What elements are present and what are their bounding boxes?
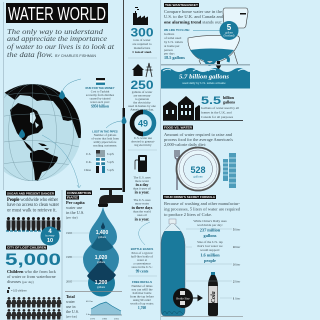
text: per capita: in the U.S. [66, 210, 84, 215]
text: oil comparison: in a year. [135, 190, 149, 194]
stat: 5.5 billion gallons: gallons [223, 100, 235, 104]
panel: free refills: 1,760 [138, 306, 146, 310]
stat: 250: American per day. [130, 108, 154, 112]
text: oil comparison: The U.S. uses [133, 176, 151, 180]
drops chart: 1,020 [95, 255, 107, 261]
text: people walking for water: or must walk to retrieve it. [7, 208, 57, 214]
text: oil comparison: The U.S. uses [133, 198, 151, 202]
bottle scale labels: 5 liter [233, 228, 240, 232]
callout: 4 in every 10: 10 [47, 238, 53, 244]
heading: sugar and present danger: SUGAR AND PRESENT DANGER [7, 192, 55, 196]
panel: bottle basics: 99 cents [136, 270, 149, 274]
panel: lost in the pipes: 6 qt/$ [107, 152, 114, 156]
panel: bottle basics: a convenience [133, 262, 151, 266]
water wave band [161, 64, 250, 88]
stat: 300: are required to [132, 42, 152, 46]
callout: 5 gallons: gallons [225, 32, 233, 34]
drops chart: gallons [97, 286, 105, 289]
intro text: the data flow. [7, 51, 53, 59]
text: oil comparison: in a day [136, 183, 149, 187]
heading: home water: THE WASTEBASKET [165, 3, 198, 7]
stat: 250: gallons of water [132, 90, 153, 94]
stat: 5.5 billion gallons: 5.5 [201, 95, 221, 107]
text: per capita: Per capita [66, 200, 86, 205]
icon: honduras flag [96, 78, 105, 85]
panel: bottle basics: Price of a typical [131, 251, 153, 255]
text: food [164, 132, 233, 148]
stat: 300: 300 [130, 26, 154, 40]
text: food: Amount of water required to raise and [164, 132, 233, 137]
bottle scale labels: 1 liter [233, 296, 240, 300]
panel: lost in the pipes: of water that leak from [91, 136, 119, 140]
bottle scale labels: 4 liter [233, 245, 240, 249]
text: china: While China's Daily uses [193, 219, 227, 223]
text: drink [164, 201, 241, 217]
icon: gas pump [135, 155, 147, 172]
panel: free refills: from the tap before [130, 294, 155, 298]
intro text: of water to our lives is to look at [7, 43, 115, 51]
panel: free refills: worth of tap water: [130, 302, 154, 306]
text: oil comparison [132, 176, 153, 222]
text: china: 237 million [200, 228, 221, 232]
callout: 5 gallons [193, 21, 238, 40]
legend: = 100 children [11, 290, 27, 292]
drops chart: 1,400 [96, 230, 108, 236]
bottle scale [186, 229, 232, 298]
globe map [0, 79, 85, 188]
panel: lost in the pipes: 5 qt/$ [107, 160, 114, 164]
panel: bottle basics [131, 222, 154, 274]
text: china: would support: [200, 248, 220, 252]
panel: lost in the pipes [84, 121, 121, 173]
icon: faucet [98, 188, 123, 207]
text: oil comparison: in three days [132, 206, 153, 210]
area chart: total water use: water [66, 299, 76, 304]
panel: bottle basics: BOTTLE BASICS [131, 247, 153, 251]
water wave band: 5.7 billion gallons [179, 74, 230, 80]
stat: 300: manufacture [134, 46, 151, 50]
intro text: BY CHARLES FISHMAN [55, 54, 97, 58]
donut: 49 percent [131, 112, 155, 147]
callout: circle arrow [173, 288, 202, 308]
panel: free refills: half-liter bottle [133, 291, 152, 295]
text: we like to flush: Gallons [164, 32, 175, 36]
stat: 300 [130, 26, 154, 54]
text: china: 1.6 million [200, 252, 220, 258]
stat: 250: used in homes by one [128, 104, 156, 108]
panel: free refills: using 99 cents' [133, 298, 152, 302]
text: food: process food for the average American's [164, 137, 233, 142]
text: china [193, 219, 227, 263]
donut: 49 percent: 49 [138, 118, 148, 128]
text: we like to flush: WE LIKE TO FLUSH [164, 28, 189, 32]
stat: 250 [128, 78, 156, 112]
text: per capita [66, 200, 86, 220]
text: we like to flush: of toilet used [164, 36, 182, 40]
donut: 49 percent: devoted to generat- [131, 140, 155, 144]
drops chart: gallons [98, 236, 106, 239]
area chart: total water use: use in [66, 304, 75, 309]
panel: lost in the pipes: 5 qt/$ [107, 168, 114, 172]
drops chart: 1965 [66, 231, 73, 235]
stat: 250: 250 [130, 78, 154, 92]
text: china: people [204, 258, 216, 263]
text: compare: one alarming trend stands out: [164, 20, 222, 24]
stat: 5.5 billion gallons: Canada for all purposes [201, 115, 234, 119]
stat: 250: to generate [135, 97, 150, 101]
panel: bottle basics: half-liter bottle of [131, 254, 154, 258]
area chart: total water use: 410 bn [86, 300, 94, 303]
panel: run for the money: water each year: [90, 100, 110, 104]
text: people walking for water: People worldwide who either [7, 198, 58, 203]
callout: 4 in every 10: in every [45, 234, 55, 238]
stat: 250: the electricity [133, 100, 151, 104]
icon: plate with fork and knife [175, 148, 236, 190]
callout: circle arrow: Bottle Size [176, 296, 190, 300]
icon: factory [133, 7, 148, 25]
text: oil comparison: in a year. [135, 218, 149, 222]
text: people walking for water [7, 198, 59, 214]
panel: lost in the pipes: LOST IN THE PIPES [92, 130, 118, 134]
area chart: total water use: 0 bn [86, 313, 91, 316]
text: compare: U.S. to the U.K. and Canada and [164, 14, 224, 19]
stat: 5.5 billion gallons: billion [223, 95, 235, 100]
text: drink: Because of washing and other manufactur- [164, 201, 241, 206]
panel: lost in the pipes: utility pipes before [94, 140, 117, 144]
heading: consumption [66, 190, 92, 200]
donut: 49 percent: ing electricity [134, 143, 152, 147]
panel: run for the money: economy from diarrhea [86, 93, 115, 97]
stat: 5,000: 5,000 [5, 250, 61, 269]
stat: 300: tons of water [133, 38, 152, 42]
panel: run for the money [86, 78, 115, 108]
panel: run for the money: Cost to Turkish [91, 90, 110, 94]
callout: 5 gallons: (Scotland) [224, 34, 235, 38]
drops chart: 1985 [66, 255, 73, 259]
text: oil comparison: more water [135, 179, 149, 183]
panel: lost in the pipes: reaching customers: [93, 144, 117, 148]
text: china: that's lost water we [197, 244, 223, 248]
text: china: gallons [204, 233, 217, 238]
panel: free refills: you can refill the [131, 288, 153, 292]
panel: lost in the pipes: U.S. [86, 152, 91, 156]
icon: toilet [188, 8, 248, 70]
donut: 49 percent: U.S. water use [134, 136, 153, 140]
area chart: total water use [66, 294, 122, 320]
callout: 4 in every 10: 4 [48, 229, 52, 235]
stat: 250: are necessary [133, 94, 151, 98]
drops chart: gallons [97, 261, 105, 264]
panel: lost in the pipes: U.K. [86, 160, 92, 164]
panel: bottle basics: store in the U.S.: [132, 265, 153, 269]
icon: small cola bottle [208, 272, 218, 316]
heading: your drink's secret formula: YOUR DRINK'S SECRET FORMULA [164, 195, 216, 199]
panel: run for the money: RUN FOR THE MONEY [86, 86, 115, 90]
heading: consumption: RATE [67, 196, 78, 200]
callout: 4 in every 10 [40, 226, 60, 246]
text: oil comparison: uses oil [137, 213, 147, 217]
panel: run for the money: $950 billion [91, 104, 109, 108]
callout: 5 gallons: 5 [227, 23, 232, 32]
text: china: worldwide per day: [197, 223, 223, 227]
text: drink: to produce 2 liters of Coke. [164, 212, 212, 217]
icon: row houses [163, 96, 200, 120]
heading: consumption: CONSUMPTION [67, 191, 91, 195]
pipe [122, 0, 126, 192]
legend [7, 287, 27, 293]
intro text: and appreciate the importance [7, 35, 108, 43]
drops chart: 1,200 [95, 280, 107, 286]
children figures [6, 297, 62, 320]
text: compare: Compare home water use in the [164, 9, 222, 14]
stat: 300: 1 ton of steel. [132, 50, 152, 54]
icon: large water bottle [161, 219, 185, 316]
text: per capita: water use [66, 205, 82, 210]
text: we like to flush: at home per [164, 44, 180, 48]
panel: free refills: FREE REFILLS [132, 280, 152, 284]
bottle scale labels: 3 liter [233, 262, 240, 266]
text: we like to flush: by U.S. toilets [164, 40, 184, 44]
icon: flags [96, 150, 105, 173]
intro text: The only way to understand [7, 28, 103, 36]
text: oil comparison: than the world [133, 210, 151, 214]
text: per capita: (per day) [66, 216, 78, 220]
drops chart: 2005 [66, 280, 73, 284]
text: compare [164, 9, 224, 24]
text: we like to flush: 18.5 gallons [164, 55, 185, 60]
icon: house and pylon [132, 63, 152, 77]
text: children: Children who die from lack [7, 269, 57, 274]
stat: 5.5 billion gallons: Gallons of water used by all [201, 106, 239, 110]
heading: city of lost children: CITY OF LOST CHILDREN [7, 246, 46, 250]
icon: small cola bottle: Cola [211, 291, 217, 303]
stat: 5.5 billion gallons [201, 95, 239, 119]
water wave band: used daily by U.S. toilets at home [182, 81, 226, 85]
area chart: total water use: (per day) [66, 314, 77, 318]
text: children [7, 269, 57, 284]
text: oil comparison: more water [135, 202, 149, 206]
text: drink: ing processes, 5 liters of water are required [164, 206, 241, 212]
panel: run for the money: caused by tainted [90, 96, 111, 100]
bottle scale labels [233, 228, 240, 300]
panel: bottle basics: water at [137, 258, 147, 262]
people figures [6, 217, 61, 231]
icon: plate with fork and knife: gallons [193, 174, 203, 178]
text: people walking for water: have no access to clean water [7, 203, 59, 208]
panel: free refills [130, 280, 155, 310]
panel: lost in the pipes: Number of gallons [94, 133, 117, 137]
stat: 5.5 billion gallons: homes in the U.K. and [201, 110, 232, 114]
text: china: Size of the U.S. tap [197, 240, 223, 244]
panel: lost in the pipes: China [84, 168, 92, 172]
title: WATER WORLD [8, 4, 106, 24]
heading: food vs water: FOOD VS. WATER [164, 126, 193, 130]
drops chart [66, 207, 119, 296]
area chart: total water use: the U.S. [66, 309, 79, 314]
icon: plate with fork and knife: 528 [190, 165, 206, 175]
text: we like to flush [164, 28, 189, 60]
text: we like to flush: person [164, 48, 173, 52]
text: we like to flush: per day: [164, 52, 175, 56]
text: children: of water or from waterborne [7, 274, 56, 279]
panel: free refills: Number of times [132, 284, 153, 288]
bottle scale labels: 2 liter [233, 280, 240, 284]
text: oil comparison: than it uses oil [133, 186, 151, 190]
text: children: diseases (per day) [7, 279, 34, 284]
area chart: total water use: Total [66, 294, 76, 299]
text: food: 2,000-calorie daily diet: [164, 142, 206, 148]
intro text [7, 28, 115, 59]
